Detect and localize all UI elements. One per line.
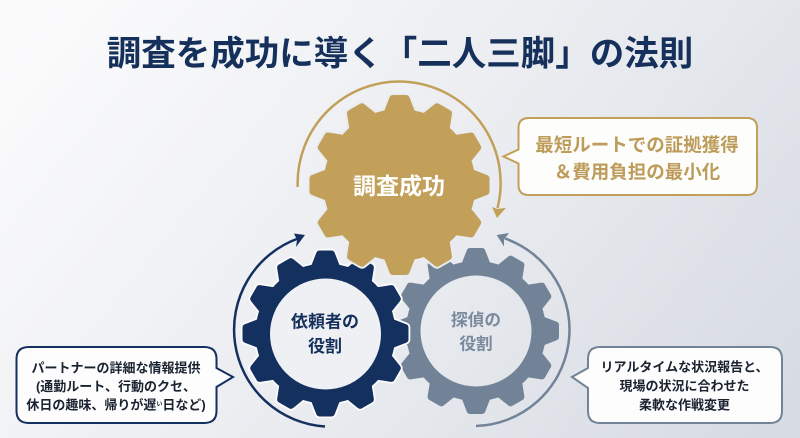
callout: goal: 最短ルートでの証拠獲得 bbox=[535, 134, 739, 156]
gear: client role: 依頼者の bbox=[291, 312, 359, 332]
gear: investigation success: 調査成功 bbox=[353, 173, 445, 199]
callout: detective details: 柔軟な作戦変更 bbox=[639, 398, 730, 412]
callout: client details bbox=[16, 347, 233, 423]
gear: detective role: 役割 bbox=[459, 334, 493, 354]
gear: detective role: 探偵の bbox=[451, 310, 501, 330]
callout: client details: パートナーの詳細な情報提供 bbox=[31, 360, 201, 376]
gear: investigation success bbox=[310, 95, 490, 275]
callout: goal bbox=[504, 118, 757, 195]
callout: detective details: 現場の状況に合わせた bbox=[619, 378, 750, 394]
arrow: gold arc bbox=[298, 82, 506, 218]
arrow: slate arc bbox=[476, 233, 570, 426]
callout: detective details: リアルタイムな状況報告と、 bbox=[600, 360, 769, 374]
arrow: navy arc bbox=[234, 234, 325, 426]
callout: client details: (通勤ルート、行動のクセ、 bbox=[36, 379, 196, 394]
gear: client role: 役割 bbox=[308, 337, 342, 356]
callout: detective details bbox=[572, 347, 782, 423]
title: 調査を成功に導く「二人三脚」の法則 bbox=[107, 36, 693, 74]
callout: goal: ＆費用負担の最小化 bbox=[554, 162, 721, 182]
gear: client role bbox=[243, 251, 408, 416]
gear: detective role bbox=[393, 248, 559, 414]
callout: client details: 休日の趣味、帰りが遅い日など) bbox=[26, 398, 206, 412]
